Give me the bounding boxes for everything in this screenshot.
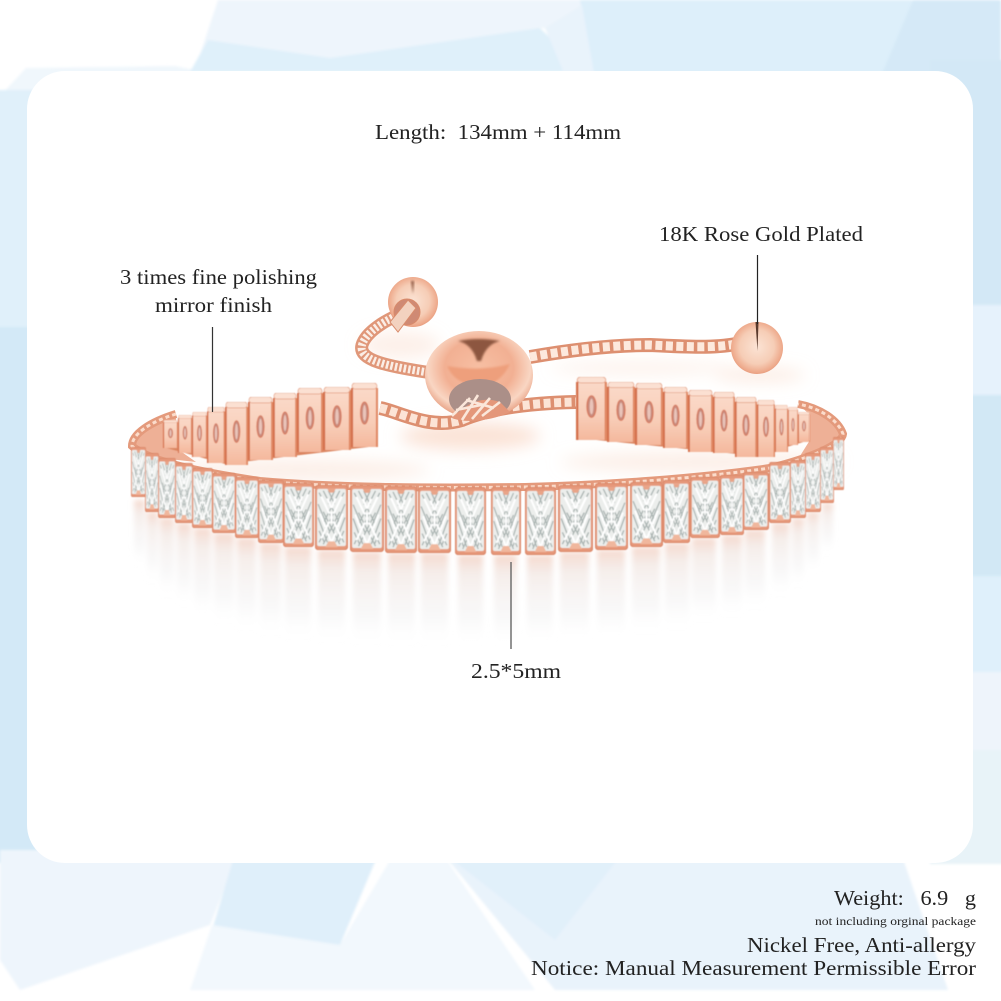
back row plates left (162, 383, 379, 465)
label: stone dimensions: 2.5*5mm (471, 659, 561, 683)
rim band connecting front and back rows (132, 404, 843, 487)
back row plates right (575, 377, 810, 457)
label: plating: 18K Rose Gold Plated (659, 222, 863, 246)
panel: white rounded card (27, 71, 973, 863)
spec: notice: Notice: Manual Measurement Permissible Error (531, 956, 976, 980)
callout line: mirror finish (212, 327, 214, 412)
callout line: rose gold plated (756, 255, 758, 324)
front row baguette stones (131, 437, 844, 555)
label: polishing line one: 3 times fine polishing (120, 265, 317, 289)
spec: weight: Weight: 6.9 g (834, 886, 976, 910)
spec: nickel free: Nickel Free, Anti-allergy (747, 933, 976, 957)
label: polishing line two: mirror finish (155, 293, 272, 317)
reflection of the stones (134, 500, 833, 645)
bracelet product drawing (131, 277, 844, 645)
end ball right (731, 322, 783, 374)
label: length: Length: 134mm + 114mm (375, 120, 621, 144)
spec: weight note: not including orginal package (815, 916, 976, 928)
callout line: stone size (510, 562, 512, 649)
slider bead (425, 331, 533, 421)
end ball left (388, 277, 438, 332)
shadow glow on the floor (170, 331, 840, 480)
sliding chain (362, 312, 736, 423)
